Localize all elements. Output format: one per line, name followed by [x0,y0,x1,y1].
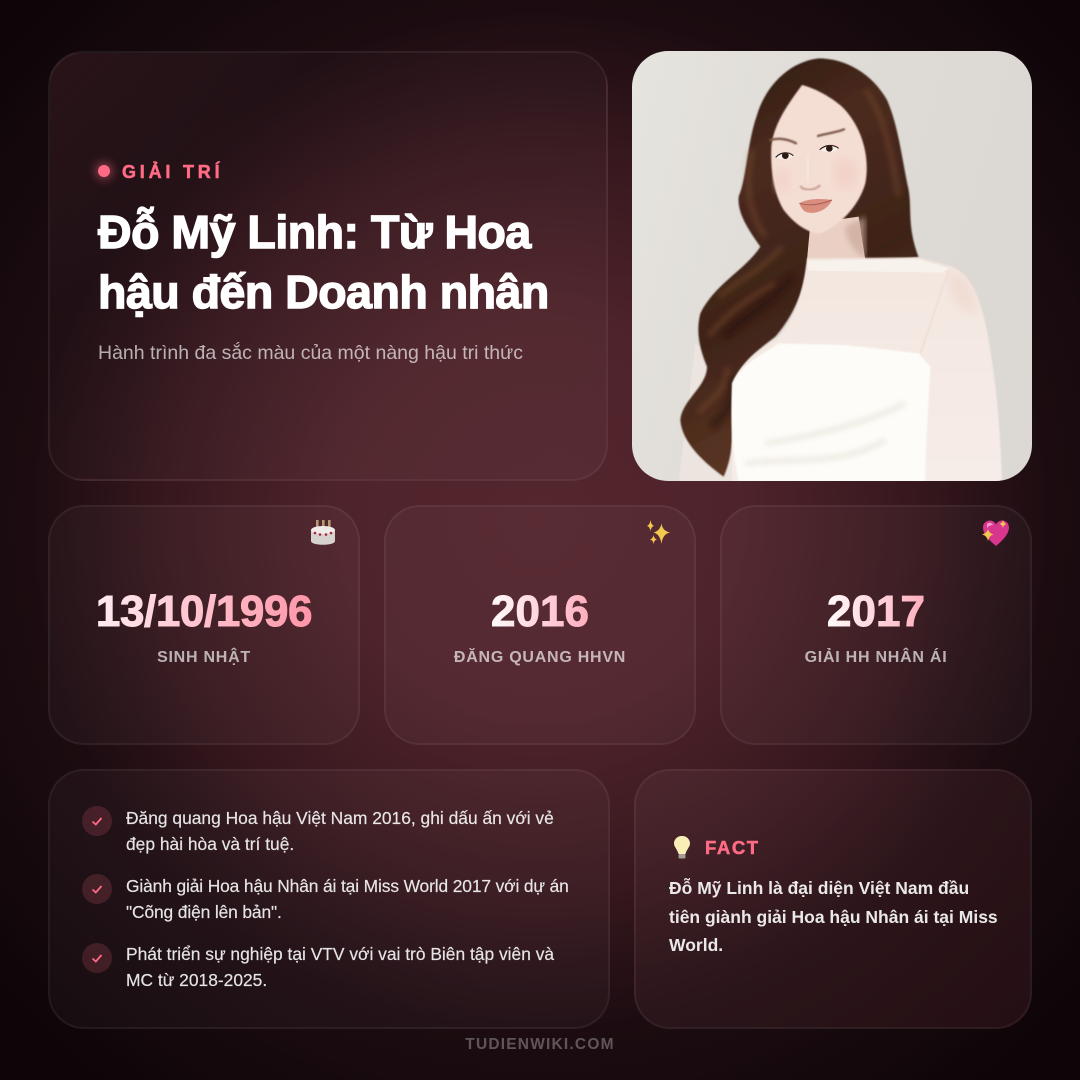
icon: check [82,806,112,836]
value [722,590,1030,634]
value [386,590,694,634]
label: SINH NHẬT [157,649,251,666]
icon: sparkles [647,520,670,544]
fact text: World. [669,935,723,955]
fact text: Đỗ Mỹ Linh là đại diện Việt Nam đầu [669,878,969,898]
list item 3 [82,943,554,990]
sheer top [732,257,1002,482]
list item 2 [82,874,569,922]
text: Giành giải Hoa hậu Nhân ái tại Miss World 2017 với dự án [126,876,569,896]
value [50,590,358,634]
value: 13/10/1996 [96,587,312,636]
title [97,206,549,318]
icon: light bulb [674,836,690,858]
label: ĐĂNG QUANG HHVN [454,649,626,666]
text: đẹp hài hòa và trí tuệ. [126,834,294,854]
text: "Cõng điện lên bản". [126,902,282,922]
title: Đỗ Mỹ Linh: Từ Hoa [98,206,531,258]
icon: check [82,874,112,904]
subtitle: Hành trình đa sắc màu của một nàng hậu tri thức [98,342,523,364]
eyes [775,153,793,159]
nose [800,185,820,190]
face [771,85,867,233]
panel: highlights list [48,769,610,1029]
text [126,944,554,990]
white dress [732,343,930,482]
title: hậu đến Doanh nhân [98,266,549,318]
stat card: crowned [384,505,696,745]
text: Phát triển sự nghiệp tại VTV với vai trò Biên tập viên và [126,944,554,964]
list item 1 [82,806,554,854]
category label: GIẢI TRÍ [122,162,223,182]
hair highlights [699,90,899,413]
panel: hero [48,51,608,481]
text [126,808,554,854]
photo: portrait [632,51,1032,481]
fact heading: FACT [705,837,760,858]
brows [770,129,844,143]
sheer sleeve left [679,344,732,481]
fact text [669,878,998,955]
text: MC từ 2018-2025. [126,970,267,990]
neck [807,217,865,260]
text [126,876,569,922]
category dot [98,165,110,177]
footer: source: TUDIENWIKI.COM [465,1036,615,1053]
panel: fact [634,769,1032,1029]
icon: sparkling heart [982,520,1009,546]
value: 2016 [491,587,589,636]
icon: cake [311,520,335,545]
icon: check [82,943,112,973]
stat card: beauty with a purpose [720,505,1032,745]
fact text: tiên giành giải Hoa hậu Nhân ái tại Miss [669,906,998,926]
stat card: birthday [48,505,360,745]
label: GIẢI HH NHÂN ÁI [805,649,947,666]
value: 2017 [827,587,925,636]
hair [680,58,919,477]
lips [799,199,832,213]
text: Đăng quang Hoa hậu Việt Nam 2016, ghi dấu ấn với vẻ [126,808,554,828]
